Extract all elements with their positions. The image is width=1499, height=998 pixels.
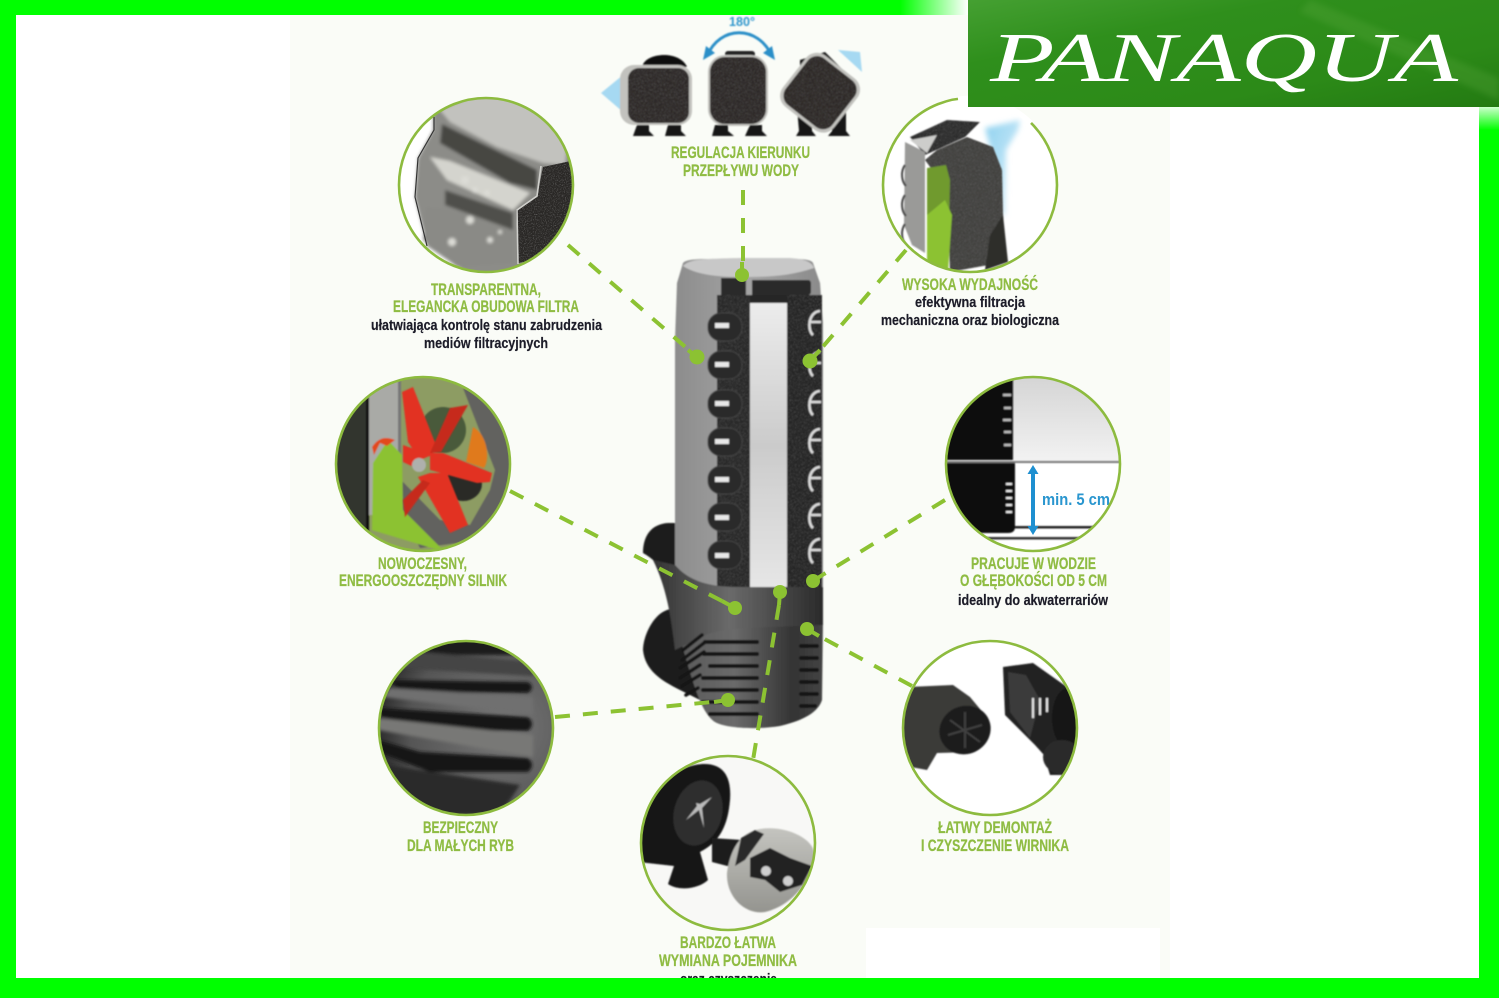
panel: shallow water: [943, 375, 1125, 609]
circle ring: [399, 98, 573, 272]
filter lower nozzle: [643, 609, 700, 700]
circle photo: water depth: [947, 378, 1119, 540]
filter clear strip: [750, 303, 787, 588]
label: idealny do akwaterrariów: [958, 592, 1108, 609]
circle ring: [379, 641, 553, 815]
connector dots: [688, 262, 824, 707]
label: [658, 936, 797, 978]
circle ring: [641, 756, 815, 930]
product: filter unit: [643, 258, 823, 728]
impeller blades: [402, 387, 492, 533]
filter clamp band: [653, 560, 823, 650]
label: [407, 818, 514, 855]
right view: [774, 47, 866, 138]
left view: [601, 55, 692, 136]
filter top slot: [721, 278, 811, 295]
label: efektywna filtracja: [915, 294, 1026, 311]
circle photo: disassembled filter: [642, 762, 814, 914]
panel: motor: [330, 370, 515, 590]
logo banner: PANAQUA: [968, 0, 1499, 107]
label: oraz czyszczenie: [680, 971, 777, 988]
foam corner: [516, 160, 575, 263]
filter left buttons: [708, 313, 742, 569]
filter top cap: [683, 258, 814, 277]
depth value: min. 5 cm: [1042, 491, 1110, 509]
panel: transparent housing: [371, 90, 603, 352]
label: [921, 818, 1069, 855]
circle ring: [883, 98, 1057, 272]
label: DLA MAŁYCH RYB: [407, 836, 514, 855]
central pale panel: [290, 15, 1170, 978]
panel: safe for small fish: [378, 640, 554, 852]
panel: high performance: [881, 98, 1060, 329]
centre view: [708, 51, 768, 136]
label: [371, 280, 603, 352]
label: flow direction: [671, 143, 810, 180]
filter foam bridge: [750, 295, 787, 304]
filter foam panel right: [785, 295, 822, 588]
panel: cartridge replacement: [637, 756, 815, 988]
circle photo: motor and housing: [904, 662, 1076, 776]
filter vents: horizontal: [703, 642, 817, 714]
filter upper left nozzle: [643, 523, 680, 590]
blue arc arrow: [703, 33, 775, 60]
label: O GŁĘBOKOŚCI OD 5 CM: [960, 571, 1107, 590]
filter body: [675, 259, 823, 590]
label: PRACUJE W WODZIE: [971, 554, 1096, 573]
banner leaf highlight: [1300, 0, 1499, 100]
label: ENERGOOSZCZĘDNY SILNIK: [339, 571, 508, 590]
label: WYSOKA WYDAJNOŚĆ: [902, 275, 1038, 294]
label: ELEGANCKA OBUDOWA FILTRA: [393, 297, 579, 316]
banner wordmark: PANAQUA: [988, 20, 1458, 97]
icon: 180 degree rotation views: [601, 14, 866, 138]
label: BARDZO ŁATWA: [680, 933, 776, 952]
label: [881, 275, 1060, 329]
connector dashed lines: [510, 190, 945, 760]
white patch bottom right: [866, 928, 1160, 978]
circle ring: [903, 641, 1077, 815]
circle ring: [946, 377, 1120, 551]
label: NOWOCZESNY,: [378, 554, 467, 573]
label: ułatwiająca kontrolę stanu zabrudzenia: [371, 317, 603, 334]
filter base housing: [675, 618, 823, 728]
label: flow direction: REGULACJA KIERUNKU: [671, 143, 810, 162]
label: [958, 554, 1108, 609]
label: mechaniczna oraz biologiczna: [881, 312, 1060, 329]
panel: easy rotor cleaning: [900, 641, 1084, 855]
label: TRANSPARENTNA,: [431, 280, 541, 299]
label: WYMIANA POJEMNIKA: [659, 951, 797, 970]
filter right hooks: [809, 311, 821, 563]
label: [339, 554, 508, 590]
label: flow direction: PRZEPŁYWU WODY: [683, 161, 799, 180]
circle photo: water flow through foam: [900, 118, 1022, 270]
rotation label: 180°: [729, 14, 755, 29]
label: mediów filtracyjnych: [424, 335, 548, 352]
circle photo: red impeller: [337, 378, 509, 550]
label: ŁATWY DEMONTAŻ: [938, 818, 1052, 837]
filter foam panel left: [717, 295, 752, 588]
filter vents: diagonal: [680, 635, 704, 695]
depth arrow: [1028, 465, 1038, 535]
banner background: [968, 0, 1499, 107]
label: I CZYSZCZENIE WIRNIKA: [921, 836, 1069, 855]
label: BEZPIECZNY: [423, 818, 498, 837]
circle photo: intake slots: [380, 642, 552, 814]
circle ring: [336, 377, 510, 551]
blue water jet: [985, 120, 1020, 215]
circle photo: housing detail: [413, 99, 572, 271]
